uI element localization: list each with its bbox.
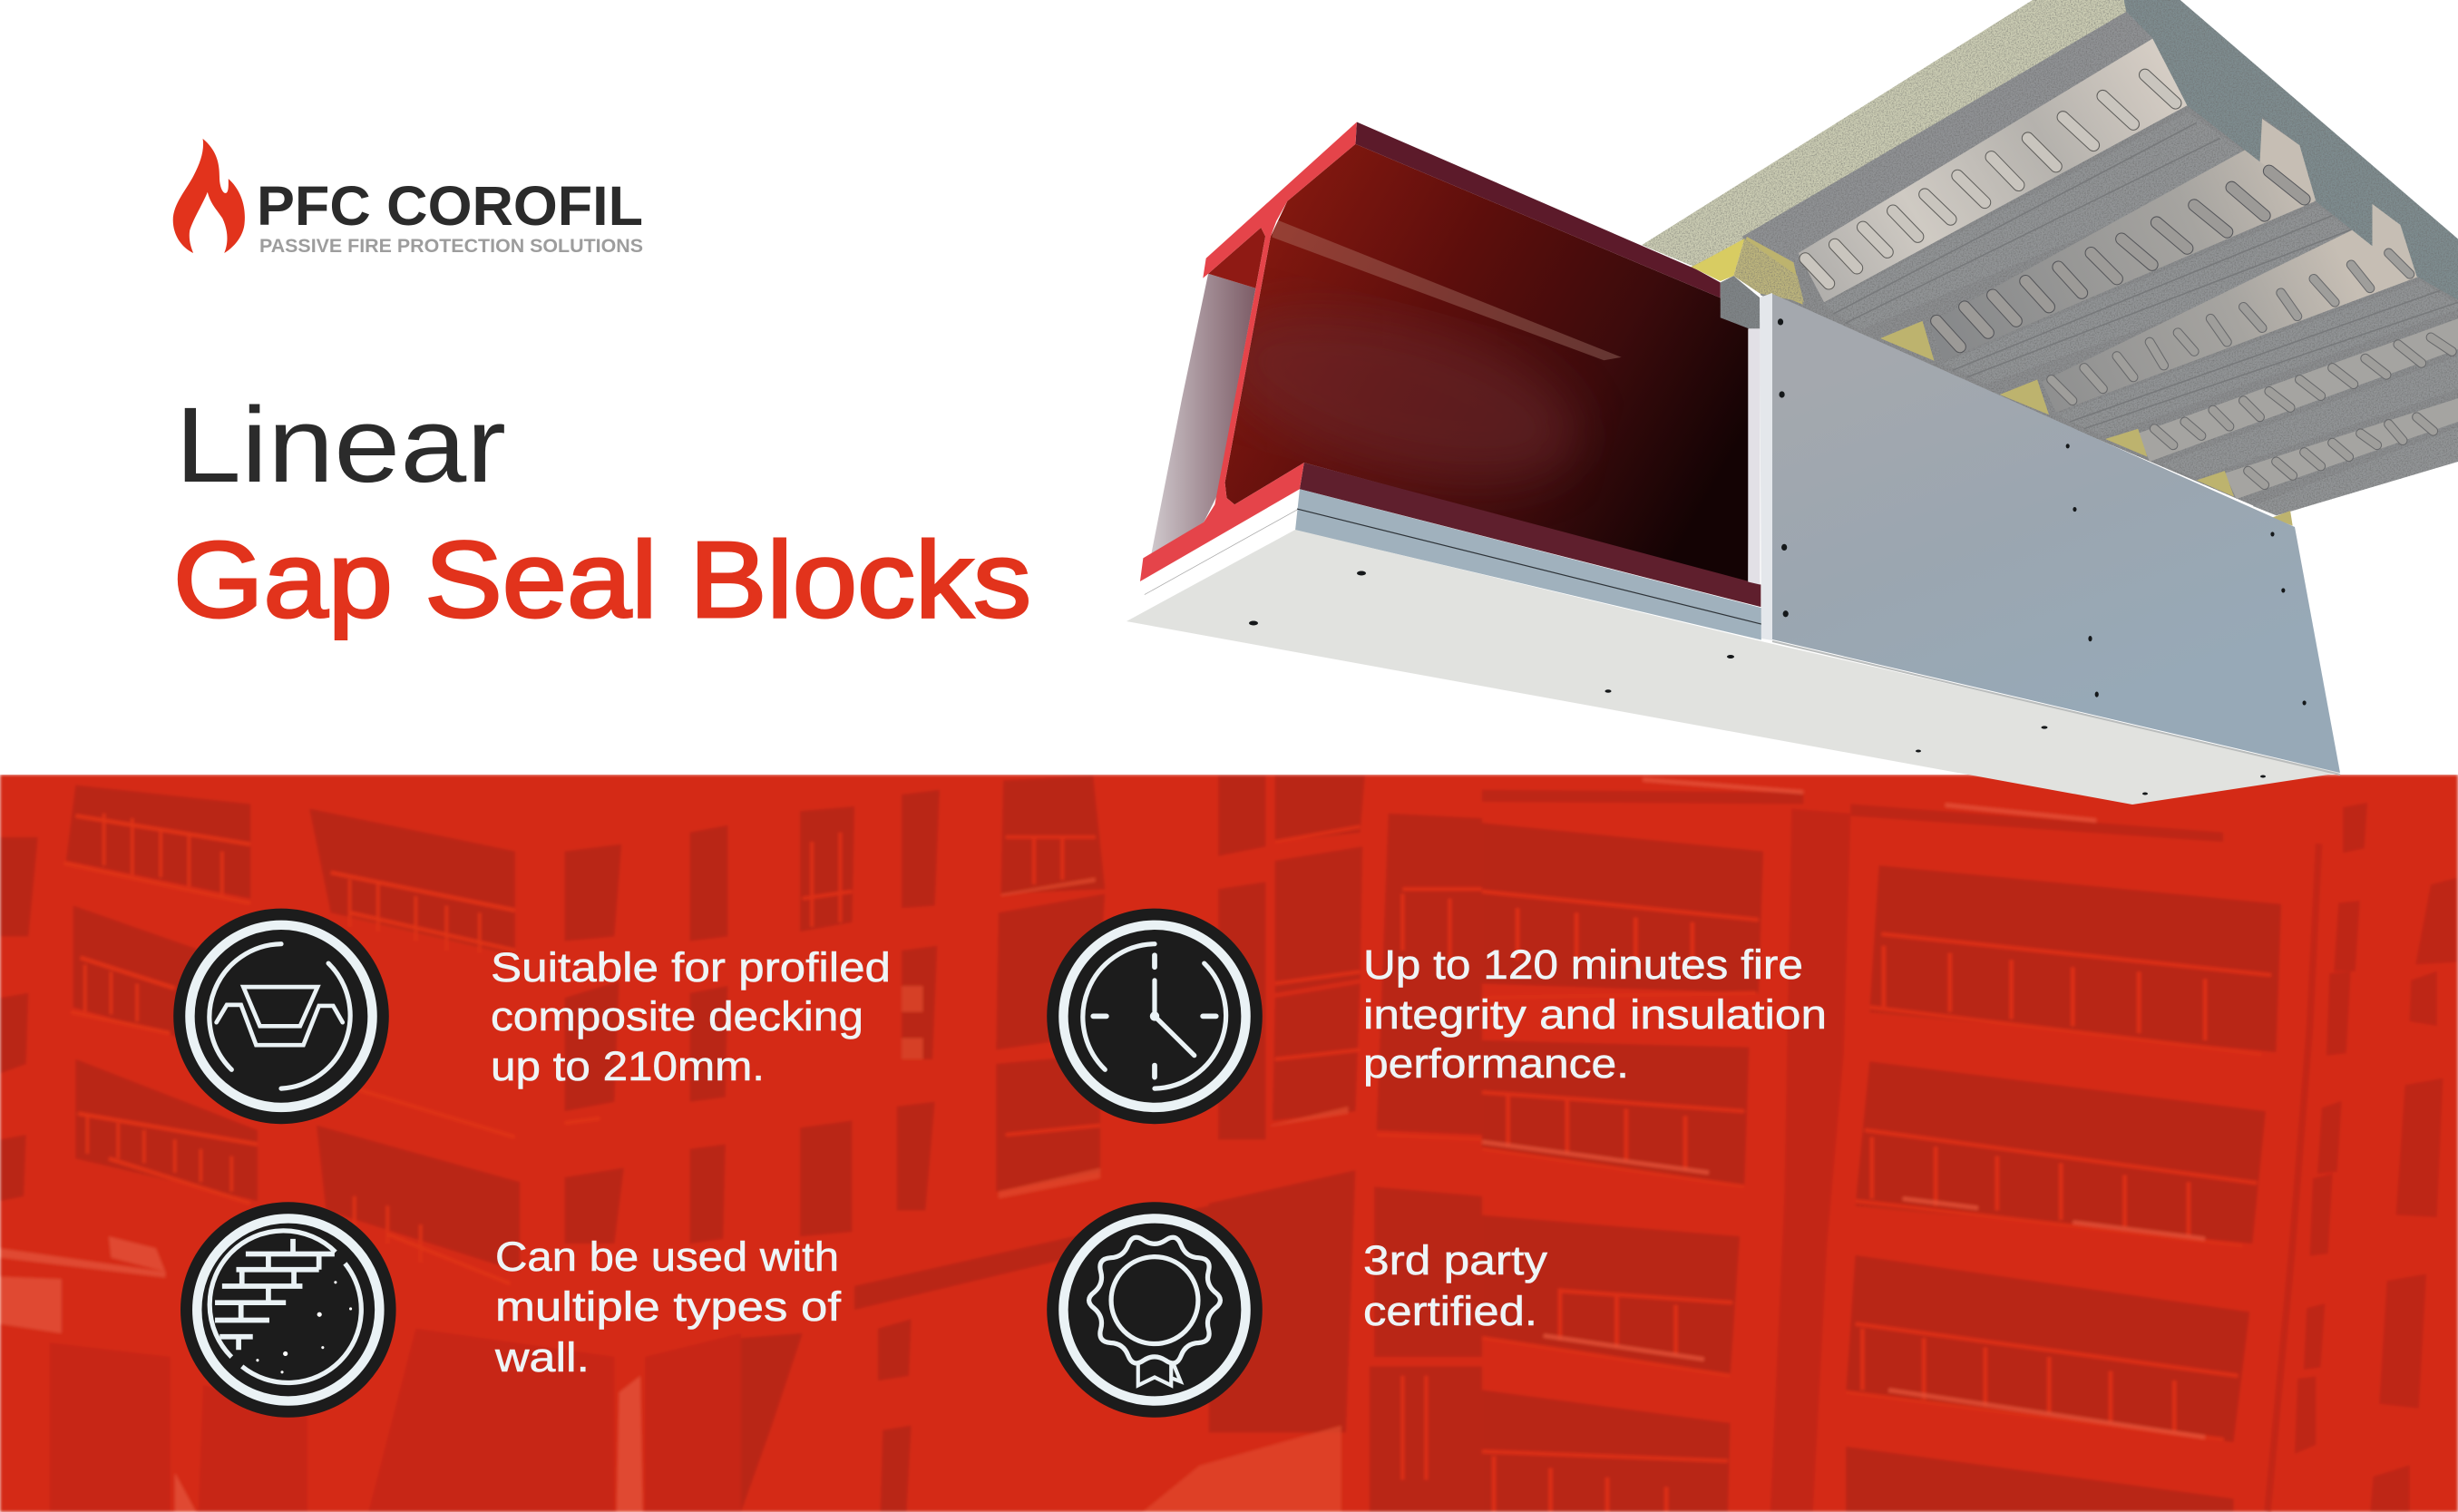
logo wordmark: PFC COROFIL [257, 175, 643, 237]
text: fire performance: integrity and insulation [1363, 991, 1827, 1038]
text: wall types: multiple types of [495, 1283, 842, 1330]
icon: decking profile [173, 909, 389, 1124]
fire board soffit [1127, 530, 2340, 805]
panel: red building photo background [0, 775, 2458, 1512]
concrete deck top edge [1642, 0, 2131, 267]
rock wool [1692, 239, 1744, 281]
icon: clock [1047, 909, 1263, 1124]
icon: rosette [1047, 1202, 1263, 1418]
icon: brick and concrete wall [180, 1202, 396, 1418]
fire board side panel [1770, 293, 2340, 773]
rock wool block [1733, 239, 1804, 302]
text: fire performance: performance. [1363, 1040, 1629, 1087]
text: wall types: wall. [494, 1334, 590, 1380]
text: fire performance: Up to 120 minutes fire [1363, 941, 1803, 988]
beam rear flange face [1151, 274, 1255, 555]
icon: flame [173, 139, 245, 253]
soffit screws [1249, 571, 2266, 795]
feature: fire performance [1047, 909, 1839, 1124]
text: wall types: Can be used with [495, 1234, 839, 1280]
red I-section cut end [1140, 122, 1357, 581]
logo strapline: PASSIVE FIRE PROTECTION SOLUTIONS [259, 236, 643, 257]
panel bottom edge line [1772, 641, 2340, 775]
title line: Linear: Linear [175, 385, 506, 505]
text: decking: composite decking [491, 993, 863, 1039]
text: decking: Suitable for profiled [491, 944, 891, 990]
text: decking: up to 210mm. [491, 1043, 765, 1089]
profiled steel deck ribs [1742, 12, 2458, 515]
panel white edge strip [1760, 293, 1772, 640]
board edge [1295, 489, 1761, 640]
web shading [1242, 220, 1622, 487]
lower flange face [1300, 463, 1761, 607]
feature: certification [1047, 1202, 1559, 1418]
top flange underside [1355, 122, 1721, 298]
wall panel screws [1778, 318, 2307, 705]
illustration: fire-protected steel beam and composite deck [1127, 0, 2458, 805]
yellow mineral wool insulation [1691, 237, 2293, 526]
white return strip [1748, 328, 1760, 584]
feature: wall types [180, 1202, 853, 1418]
galvanised bracket [1721, 276, 1760, 328]
inner fillet [1208, 228, 1265, 288]
steel beam [1140, 122, 1804, 640]
beam web [1225, 144, 1749, 583]
text: certification: certified. [1363, 1288, 1537, 1334]
text: certification: 3rd party [1363, 1237, 1548, 1283]
title line: Gap Seal Blocks: Gap Seal Blocks [173, 520, 1031, 640]
title [173, 385, 1031, 640]
concrete deck side face [2124, 0, 2458, 300]
feature: profiled decking [173, 909, 902, 1124]
logo: PFC Corofil [173, 139, 643, 257]
